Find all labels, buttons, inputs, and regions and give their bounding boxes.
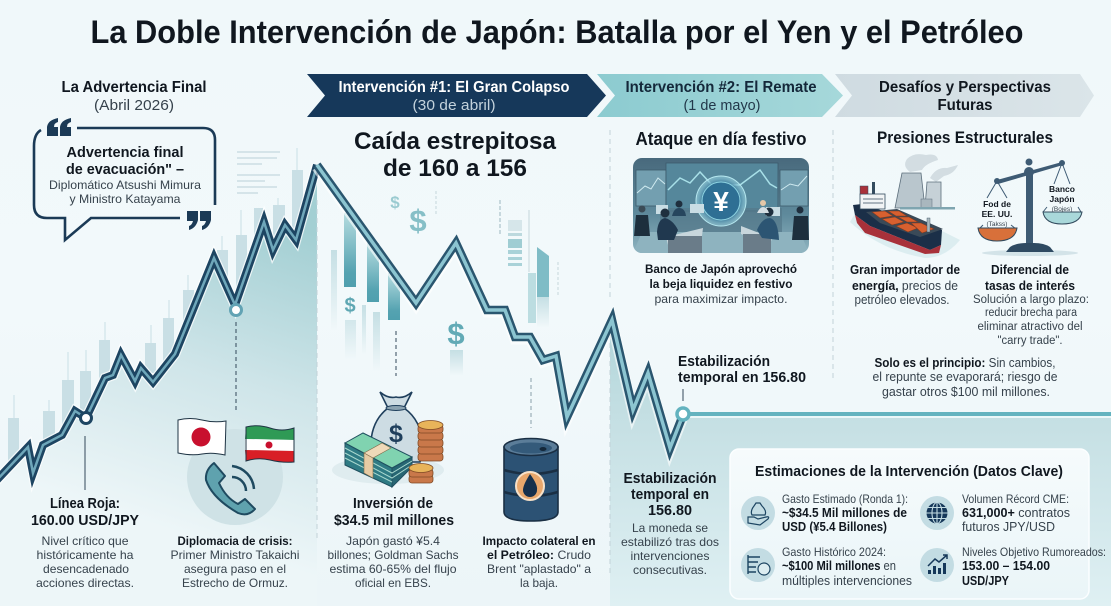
- icon: opening quote: [47, 118, 71, 136]
- scale labels: Banco: [1049, 184, 1075, 194]
- falling candles and dollar signs: $: [344, 295, 356, 317]
- text: estabilización temporal: Estabilización: [624, 471, 716, 487]
- text: diplomacia de crisis: Primer Ministro Takaichi: [170, 548, 300, 562]
- text: diplomacia de crisis: asegura paso en el: [184, 562, 286, 576]
- panel: datos clave: [730, 449, 1106, 599]
- icon: closing quote: [187, 211, 211, 230]
- callout text: y Ministro Katayama: [70, 192, 181, 206]
- text: diplomacia de crisis: [170, 534, 300, 590]
- stat: gasto estimado: [782, 492, 908, 534]
- callout text: Diplomático Atsushi Mimura: [49, 178, 201, 192]
- scale labels: EE. UU.: [982, 209, 1012, 219]
- stat: gasto histórico: múltiples intervenciones: [782, 573, 912, 588]
- text: diplomacia de crisis: Diplomacia de crisis:: [178, 534, 292, 548]
- text: banco de japón: la beja liquidez en festivo: [650, 277, 792, 291]
- icon: growth chart: [920, 548, 954, 582]
- banner: intervención 2: (1 de mayo): [684, 97, 760, 114]
- callout text: de evacuación" –: [66, 162, 184, 178]
- text: estabilización temporal: [621, 471, 719, 577]
- illustration: trading room with yen: ¥: [713, 186, 729, 217]
- text: diferencial de tasas: [973, 262, 1089, 347]
- icon: telephone: [206, 463, 255, 514]
- panel heading: Estimaciones de la Intervención (Datos Clave): [755, 463, 1063, 480]
- text: diferencial de tasas: reducir brecha para: [985, 307, 1078, 319]
- callout: speech bubble: [34, 118, 215, 240]
- text: gran importador: Gran importador de: [850, 263, 960, 277]
- heading: ataque en día festivo: Ataque en día festivo: [636, 129, 806, 149]
- column heading: la advertencia final: (Abril 2026): [94, 97, 174, 114]
- label: estabilización sobre la línea: Estabilización: [678, 354, 770, 370]
- text: impacto colateral: el Petróleo: Crudo: [487, 548, 591, 562]
- heading: caída estrepitosa: de 160 a 156: [383, 155, 527, 182]
- icon: money bag, cash and coins: $: [389, 420, 403, 448]
- icon: japan flag: [178, 418, 226, 455]
- heading: presiones estructurales: Presiones Estructurales: [877, 128, 1053, 147]
- stat: niveles objetivo: 153.00 – 154.00: [962, 558, 1050, 573]
- text: inversión: $34.5 mil millones: [334, 513, 454, 529]
- banner: intervención 2: Intervención #2: El Remate: [626, 79, 817, 96]
- text: estabilización temporal: La moneda se: [632, 521, 708, 535]
- text: solo es el principio: gastar otros $100 mil millones.: [882, 385, 1050, 399]
- text: estabilización temporal: consecutivas.: [633, 563, 707, 577]
- text: gran importador: [850, 263, 960, 307]
- icon: iran flag: [245, 426, 294, 462]
- banner: desafíos: [835, 74, 1094, 117]
- icon: oil barrel: [504, 438, 558, 521]
- text: diferencial de tasas: Diferencial de: [991, 262, 1069, 277]
- text: inversión: Inversión de: [353, 496, 433, 512]
- label: estabilización sobre la línea: [678, 354, 806, 386]
- text: inversión: estima 60-65% del flujo: [330, 562, 457, 576]
- text: gran importador: energía, precios de: [852, 279, 958, 293]
- scale labels: Fod de: [983, 199, 1011, 209]
- text: banco de japón: Banco de Japón aprovechó: [645, 262, 797, 276]
- stat: gasto histórico: Gasto Histórico 2024:: [782, 545, 886, 559]
- icon: tanker ship and cooling towers: [850, 154, 960, 258]
- scale labels: (Bojes): [1052, 206, 1072, 213]
- falling candles and dollar signs: $: [409, 203, 427, 238]
- text: diferencial de tasas: tasas de interés: [985, 278, 1075, 293]
- text: línea roja: acciones directas.: [36, 576, 134, 590]
- falling candles and dollar signs: $: [447, 316, 465, 351]
- callout text: [49, 145, 201, 206]
- icon: money bag, cash and coins: [332, 392, 444, 487]
- text: inversión: billones; Goldman Sachs: [328, 548, 458, 562]
- text: solo es el principio: el repunte se evaporará; riesgo de: [872, 370, 1058, 384]
- text: diferencial de tasas: Solución a largo plazo:: [973, 294, 1089, 306]
- background candlesticks: [8, 148, 303, 470]
- heading: caída estrepitosa: Caída estrepitosa: [354, 128, 556, 155]
- heading: caída estrepitosa: [354, 128, 556, 182]
- column heading: la advertencia final: La Advertencia Final: [62, 79, 206, 96]
- text: impacto colateral: la baja.: [520, 576, 558, 590]
- area under stabilization line: [610, 322, 1111, 606]
- stat: volumen récord: Volumen Récord CME:: [962, 492, 1069, 506]
- stat: niveles objetivo: USD/JPY: [962, 573, 1009, 588]
- text: solo es el principio: Solo es el principio: Sin cambios,: [874, 356, 1056, 370]
- text: línea roja: [31, 496, 139, 590]
- stat: gasto histórico: ~$100 Mil millones en: [782, 558, 896, 573]
- banner: desafíos: Futuras: [938, 97, 992, 114]
- title: La Doble Intervención de Japón: Batalla por el Yen y el Petróleo: [90, 14, 1024, 50]
- text: línea roja: históricamente ha: [36, 548, 134, 562]
- vertical section dividers: [317, 130, 833, 575]
- falling candles and dollar signs: [331, 191, 558, 376]
- text: gran importador: petróleo elevados.: [854, 293, 950, 307]
- falling price line: [317, 165, 683, 450]
- text: impacto colateral: [482, 534, 596, 590]
- connector lines: [85, 322, 683, 490]
- text: estabilización temporal: estabilizó tras dos: [621, 535, 719, 549]
- banner: desafíos: Desafíos y Perspectivas: [879, 79, 1051, 96]
- stat: volumen récord: 631,000+ contratos: [962, 505, 1070, 520]
- text: banco de japón: [645, 262, 797, 306]
- text: diferencial de tasas: eliminar atractivo del: [978, 321, 1082, 333]
- background note lines: [237, 152, 280, 193]
- icon: coins with dollar: [741, 548, 775, 582]
- falling candles and dollar signs: $: [390, 193, 400, 212]
- text: impacto colateral: Impacto colateral en: [482, 534, 596, 548]
- scale labels: (Takss): [987, 221, 1007, 228]
- text: diferencial de tasas: "carry trade".: [998, 335, 1062, 347]
- text: banco de japón: para maximizar impacto.: [654, 292, 788, 306]
- scale labels: Japón: [1049, 194, 1075, 204]
- text: impacto colateral: Brent "aplastado" a: [487, 562, 591, 576]
- text: línea roja: Nivel crítico que: [42, 534, 129, 548]
- stat: volumen récord: futuros JPY/USD: [962, 519, 1055, 534]
- label: estabilización sobre la línea: temporal en 156.80: [678, 370, 806, 386]
- text: inversión: oficial en EBS.: [355, 576, 431, 590]
- text: solo es el principio: [872, 356, 1058, 399]
- text: estabilización temporal: intervenciones: [630, 549, 710, 563]
- stat: gasto estimado: ~$34.5 Mil millones de: [782, 505, 907, 520]
- text: inversión: Japón gastó ¥5.4: [346, 534, 440, 548]
- stat: gasto estimado: USD (¥5.4 Billones): [782, 519, 887, 534]
- callout text: Advertencia final: [66, 145, 184, 161]
- icon: diplomacy flags and phone: [178, 418, 294, 525]
- area under rising price line: [0, 165, 317, 606]
- stat: gasto estimado: Gasto Estimado (Ronda 1):: [782, 492, 908, 506]
- price markers: [80, 304, 689, 424]
- text: inversión: [328, 496, 458, 590]
- column heading: la advertencia final: [62, 79, 206, 114]
- banner: intervención 1: Intervención #1: El Gran Colapso: [338, 79, 570, 96]
- stat: niveles objetivo: [962, 545, 1106, 588]
- icon: globe: [920, 496, 954, 530]
- text: línea roja: Línea Roja:: [50, 496, 120, 512]
- illustration: trading room with yen: [633, 158, 809, 253]
- banner: intervención 1: [307, 74, 606, 117]
- banner: intervención 1: (30 de abril): [412, 97, 496, 114]
- icon: balance scale: [978, 158, 1082, 256]
- text: línea roja: desencadenado: [43, 562, 129, 576]
- text: diplomacia de crisis: Estrecho de Ormuz.: [182, 576, 288, 590]
- text: estabilización temporal: 156.80: [648, 503, 692, 519]
- scale labels: [982, 184, 1075, 228]
- stat: gasto histórico: [782, 545, 912, 588]
- rising price line: [0, 165, 317, 482]
- icon: hand with money bag: [741, 496, 775, 530]
- banner: intervención 2: [597, 74, 843, 117]
- text: estabilización temporal: temporal en: [631, 487, 709, 503]
- text: línea roja: 160.00 USD/JPY: [31, 513, 139, 529]
- stabilization line: [688, 414, 1111, 416]
- stat: volumen récord: [962, 492, 1070, 534]
